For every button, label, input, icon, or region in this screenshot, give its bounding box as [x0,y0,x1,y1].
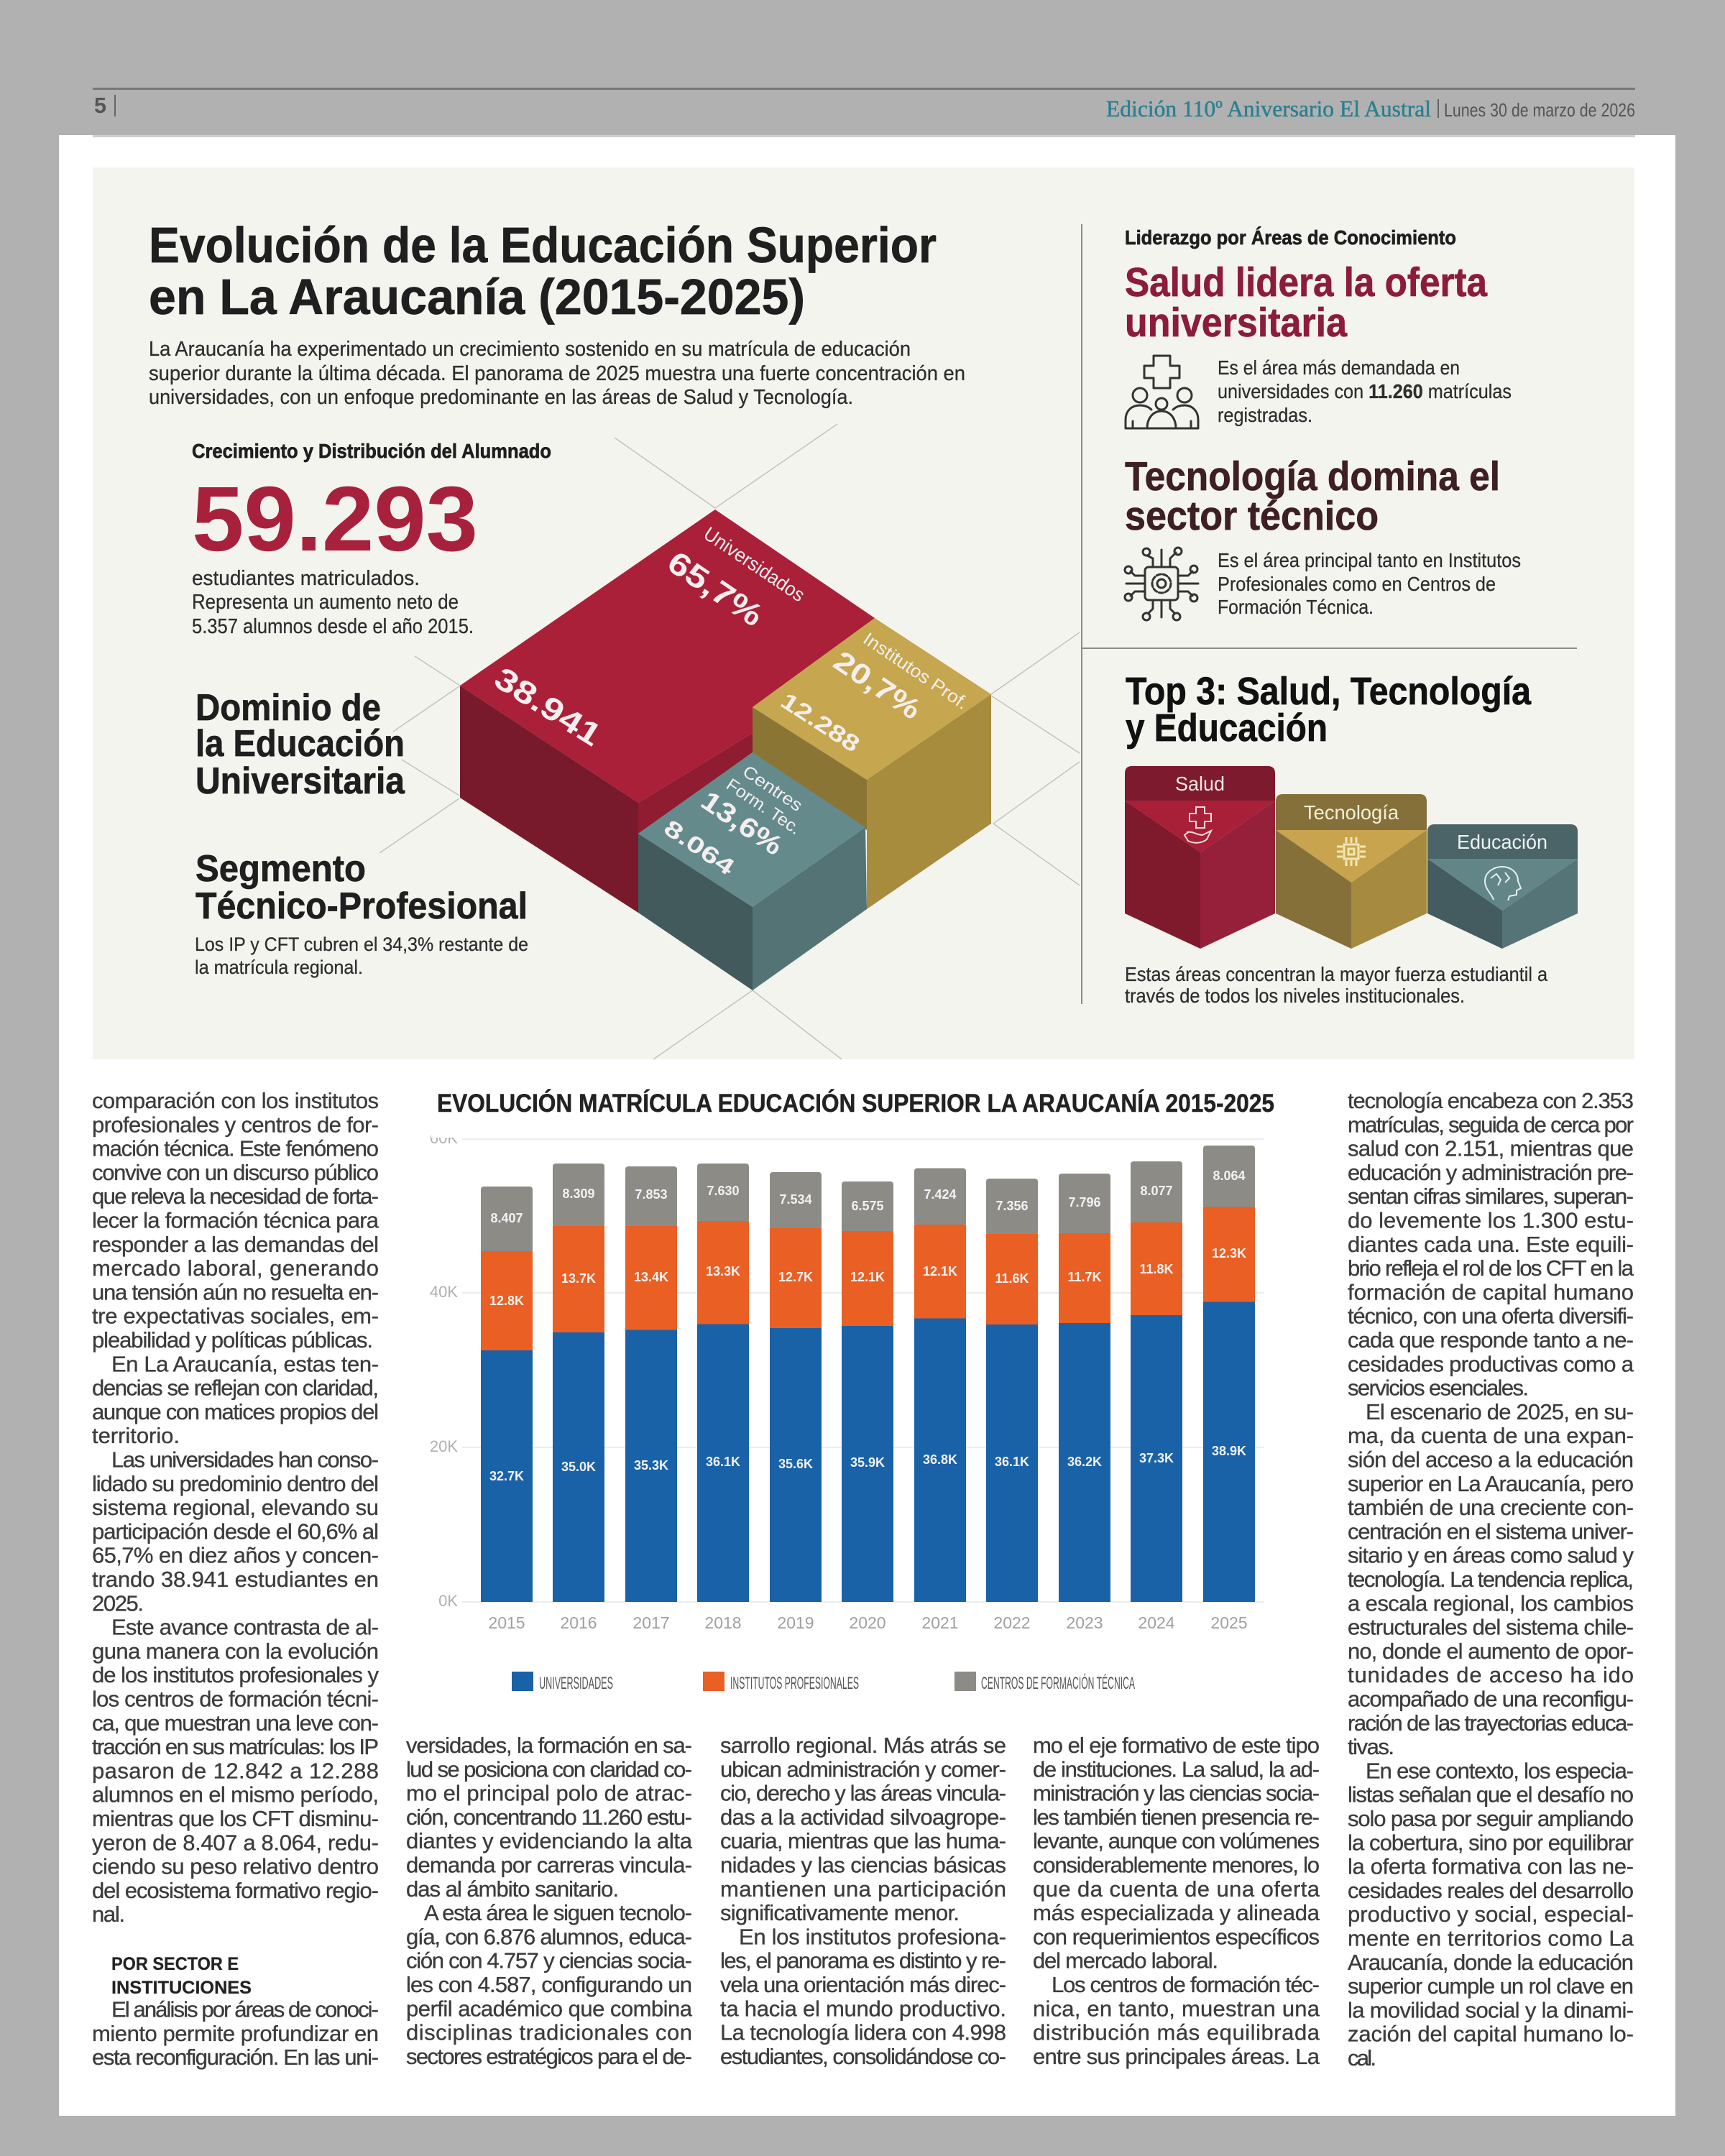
article column 3: significativamente menor. [720,1900,960,1925]
block labels: Institutos Prof. [860,629,972,714]
bar 2019: 35.6K [778,1457,813,1471]
article column 5: sitario y en áreas como salud y [1348,1543,1634,1568]
block labels: Centres [739,762,806,816]
bar 2017: 2017 [632,1613,670,1632]
article column 1: mación técnica. Este fenómeno [92,1136,379,1161]
bar 2020: 12.1K [850,1270,885,1284]
article column 5: tunidades de acceso ha ido [1348,1662,1634,1687]
article column 3: vela una orientación más direc- [720,1972,1006,1997]
bar 2018: 13.3K [706,1264,740,1279]
article column 1: Las universidades han conso- [111,1447,379,1472]
heading: top 3: y Educación [1126,706,1328,750]
article column 1: yeron de 8.407 a 8.064, redu- [92,1830,379,1855]
intro paragraph: La Araucanía ha experimentado un crecimiento sostenido en su matrícula de educación [149,338,911,361]
article column 2: lud se posiciona con claridad co- [406,1756,692,1782]
bar 2020: 2020 [849,1613,886,1632]
article column 1: 2025. [92,1590,144,1616]
article column 4: más especializada y alineada [1033,1900,1320,1925]
intro paragraph: universidades, con un enfoque predominante en las áreas de Salud y Tecnología. [149,386,853,409]
article column 1: alumnos en el mismo período, [92,1782,379,1807]
article column 5: ración de las trayectorias educa- [1348,1710,1634,1736]
bar 2015: 8.407 [490,1211,523,1225]
heading: university dominance: Universitaria [196,760,405,802]
bar 2018: 7.630 [707,1184,740,1198]
bar 2023: 11.7K [1067,1270,1102,1284]
bar 2022: 36.1K [995,1455,1029,1469]
heading: technical segment: Técnico-Profesional [196,885,528,927]
top 3 blocks [1125,766,1578,949]
article column 1: lecer la formación técnica para [92,1207,380,1233]
block: institutos [753,618,991,909]
heading: technical segment [196,848,528,927]
article column 1: pasaron de 12.842 a 12.288 [92,1758,379,1783]
article column 1: profesionales y centros de for- [92,1112,379,1137]
article column 1: lidado su predominio dentro del [92,1471,379,1496]
bar 2019: 7.534 [779,1192,812,1207]
technical segment text [195,934,528,978]
article column 2: ción, concentrando 11.260 estu- [406,1805,692,1830]
article column 1: mientras que los CFT disminu- [92,1806,379,1831]
article column 1: INSTITUCIONES [111,1978,252,1998]
article column 2: perfil académico que combina [406,1996,693,2021]
bar 2022: 7.356 [995,1199,1029,1213]
chart heading: EVOLUCIÓN MATRÍCULA EDUCACIÓN SUPERIOR LA ARAUCANÍA 2015-2025 [437,1089,1274,1118]
article column 5: no, donde el aumento de opor- [1348,1639,1634,1664]
title [149,217,937,325]
block labels: Universidados [699,522,809,606]
article column 4: entre sus principales áreas. La [1033,2044,1320,2069]
caption: top 3: través de todos los niveles institucionales. [1125,985,1465,1007]
heading: salud: Salud lidera la oferta [1125,259,1488,305]
article column 5: técnico, con una oferta diversifi- [1348,1304,1634,1329]
heading: technical segment: Segmento [196,848,366,890]
bar 2025: 38.9K [1212,1444,1246,1458]
article column 2: ción con 4.757 y ciencias socia- [406,1948,692,1973]
bar 2023: 7.796 [1068,1195,1101,1210]
article column 3: sarrollo regional. Más atrás se [720,1733,1006,1758]
bar 2018 [697,1164,749,1632]
caption: top 3: Estas áreas concentran la mayor fuerza estudiantil a [1125,963,1547,985]
article column 1: mercado laboral, generando [92,1256,379,1281]
article column 2: sectores estratégicos para el de- [406,2044,692,2069]
isometric block chart [460,510,991,990]
article column 2: diantes y evidenciando la alta [406,1828,693,1853]
article column 1: ca, que muestran una leve con- [92,1710,379,1736]
article column 5: a escala regional, los cambios [1348,1590,1634,1616]
growth description [192,567,474,638]
article column 1: comparación con los institutos [92,1088,379,1113]
article column 5: la cobertura, sino por equilibrar [1348,1830,1634,1855]
article column 5: superior cumple un rol clave en [1348,1973,1634,1999]
bar 2020: 35.9K [850,1455,885,1470]
subheading: growth: Crecimiento y Distribución del Alumnado [192,440,551,462]
article column 5: cesidades productivas como a [1348,1351,1634,1376]
article column 1: ciendo su peso relativo dentro [92,1854,379,1879]
bar 2019: 2019 [777,1613,814,1632]
article column 5: mente en territorios como La [1348,1926,1634,1950]
article column 1: participación desde el 60,6% al [92,1519,379,1544]
article column 5: cal. [1348,2045,1376,2070]
title: Evolución de la Educación Superior [149,217,937,273]
article column 5: tecnología. La tendencia replica, [1348,1567,1634,1592]
bar 2023: 36.2K [1067,1455,1102,1469]
article column 5: estructurales del sistema chile- [1348,1615,1634,1640]
article column 1: responder a las demandas del [92,1232,379,1257]
article column 5: servicios esenciales. [1348,1376,1529,1401]
article column 5: superior en La Araucanía, pero [1348,1471,1634,1496]
article column 4 [1033,1733,1320,2069]
article column 5: formación de capital humano [1348,1279,1634,1304]
growth description: estudiantes matriculados. [192,567,420,590]
block labels: 8.064 [659,814,740,880]
heading: top 3 [1126,670,1532,750]
block labels [488,522,972,880]
article column 1: del ecosistema formativo regio- [92,1878,379,1903]
block: salud [1125,766,1275,949]
text: salud: Es el área más demandada en [1218,356,1460,379]
bar 2016: 2016 [560,1613,597,1632]
chart legend: CENTROS DE FORMACIÓN TÉCNICA [981,1674,1135,1693]
heading: tecnologia [1125,453,1500,539]
y axis and grid: 60K [430,1129,458,1147]
block: educacion: Educación [1457,831,1547,853]
article column 5: brio refleja el rol de los CFT en la [1348,1256,1634,1281]
article column 1: de los institutos profesionales y [92,1662,380,1687]
heading: tecnologia: Tecnología domina el [1125,453,1500,499]
bar 2023: 2023 [1066,1613,1103,1632]
growth description: Representa un aumento neto de [192,591,459,614]
article column 5: sión del acceso a la educación [1348,1447,1634,1472]
bar 2015: 12.8K [489,1294,524,1308]
article column 4: ministración y las ciencias socia- [1033,1781,1320,1806]
subheading: leadership: Liderazgo por Áreas de Conocimiento [1125,226,1456,249]
text: salud: registradas. [1218,404,1312,426]
bar 2024 [1131,1161,1182,1632]
article column 1: Este avance contrasta de al- [111,1615,379,1640]
text: tecnologia [1218,549,1521,618]
article column 1: nal. [92,1902,125,1927]
article column 1: tracción en sus matrículas: los IP [92,1734,379,1759]
bar 2017: 13.4K [634,1270,668,1284]
block: educacion [1427,824,1578,949]
article column 2: versidades, la formación en sa- [406,1733,692,1758]
article column 5: do levemente los 1.300 estu- [1348,1207,1634,1233]
article column 5: ma, da cuenta de una expan- [1348,1423,1634,1448]
y axis and grid: 20K [430,1437,458,1455]
heading: salud [1125,259,1488,346]
bar 2016: 13.7K [561,1271,596,1286]
article column 3 [720,1733,1006,2069]
article column 4: de instituciones. La salud, la ad- [1033,1756,1320,1782]
text: tecnologia: Formación Técnica. [1218,596,1374,618]
y axis and grid: 40K [430,1283,458,1301]
article column 5: listas señalan que el desafío no [1348,1782,1634,1807]
article column 1: aunque con matices propios del [92,1399,379,1424]
block: tecnologia: Tecnología [1304,801,1399,824]
article column 4: con requerimientos específicos [1033,1924,1320,1949]
panel: infographic [93,167,1634,1059]
article column 1: que releva la necesidad de forta- [92,1184,379,1209]
article column 4: que da cuenta de una oferta [1033,1876,1320,1902]
icon: chip with gear [1125,548,1198,620]
heading: university dominance: Dominio de [196,687,381,729]
article column 5: centración en el sistema univer- [1348,1519,1634,1544]
right column rules [1081,224,1577,1004]
article column 3: les, el panorama es distinto y re- [720,1948,1006,1973]
article column 4: considerablemente menores, lo [1033,1853,1320,1877]
article column 2: mo el principal polo de atrac- [406,1781,692,1806]
bar 2016 [553,1164,604,1632]
article column 3: En los institutos profesiona- [739,1924,1006,1949]
article column 3: nidades y las ciencias básicas [720,1853,1006,1877]
article column 1: tre expectativas sociales, em- [92,1304,379,1329]
bar 2024: 2024 [1138,1613,1175,1632]
article column 2: disciplinas tradicionales con [406,2020,692,2045]
article column 3: das a la actividad silvoagrope- [720,1805,1006,1830]
bar 2021: 12.1K [923,1264,957,1279]
article column 1: sistema regional, elevando su [92,1495,379,1520]
article column 1: territorio. [92,1423,180,1448]
article column 1: pleabilidad y políticas públicas. [92,1327,373,1353]
caption: top 3 [1125,963,1547,1007]
bar 2015: 32.7K [489,1469,524,1483]
article column 1: los centros de formación técni- [92,1686,379,1712]
article column 4: del mercado laboral. [1033,1948,1218,1973]
article column 3: mantienen una participación [720,1876,1006,1902]
article column 1: trando 38.941 estudiantes en [92,1567,379,1592]
article column 1 [92,1088,380,2070]
newspaper header: Lunes 30 de marzo de 2026 [1444,99,1635,121]
technical segment text: Los IP y CFT cubren el 34,3% restante de [195,934,528,955]
article column 5: la movilidad social y la dinami- [1348,1997,1634,2022]
bar 2019: 12.7K [778,1270,813,1284]
bar 2020 [842,1181,893,1632]
article column 5: cesidades reales del desarrollo [1348,1878,1634,1903]
article column 5: también de una creciente con- [1348,1495,1634,1520]
block labels: 38.941 [488,660,607,753]
article column 5: productivo y social, especial- [1348,1902,1634,1927]
article column 2: demanda por carreras vincula- [406,1853,692,1877]
bar 2018: 2018 [704,1613,742,1632]
bar 2024: 11.8K [1139,1262,1174,1276]
bar 2017 [625,1166,677,1632]
article column 4: Los centros de formación téc- [1052,1972,1320,1997]
article column 5: En ese contexto, los especia- [1366,1758,1634,1783]
bar 2018: 36.1K [706,1455,740,1469]
article column 5: cada que responde tanto a ne- [1348,1327,1634,1353]
article column 5: acompañado de una reconfigu- [1348,1686,1634,1712]
article column 1: POR SECTOR E [111,1954,239,1974]
bar 2025: 2025 [1210,1613,1248,1632]
bar 2021 [914,1169,966,1632]
heading: salud: universitaria [1125,300,1348,346]
article column 4: les también tienen presencia re- [1033,1805,1320,1830]
heading: top 3: Top 3: Salud, Tecnología [1126,670,1532,713]
bar 2025: 12.3K [1212,1246,1246,1261]
bar 2025: 8.064 [1213,1169,1246,1183]
intro paragraph: superior durante la última década. El panorama de 2025 muestra una fuerte concentración en [149,362,965,385]
bar 2017: 35.3K [634,1458,668,1473]
bar 2024: 37.3K [1139,1451,1174,1465]
article column 1: guna manera con la evolución [92,1639,379,1664]
block labels: 12.288 [776,688,865,757]
article column 5: la oferta formativa con las ne- [1348,1854,1634,1879]
block: salud: Salud [1175,773,1225,795]
article column 3: estudiantes, consolidándose co- [720,2044,1006,2069]
article column 4: nica, en tanto, muestran una [1033,1996,1320,2021]
article column 5: sentan cifras similares, superan- [1348,1184,1634,1209]
article column 4: distribución más equilibrada [1033,2020,1320,2045]
article column 1: esta reconfiguración. En las uni- [92,2045,379,2070]
article column 2 [406,1733,693,2069]
heading: tecnologia: sector técnico [1125,493,1379,539]
chart legend: UNIVERSIDADES [539,1674,613,1693]
article column 5: zación del capital humano lo- [1348,2022,1634,2047]
chart legend [512,1672,1135,1693]
article column 1: El análisis por áreas de conoci- [111,1996,379,2022]
text: salud: universidades con 11.260 matrículas [1218,380,1512,402]
heading: university dominance [196,687,405,802]
article column 3: cuaria, mientras que las huma- [720,1828,1006,1853]
bar 2015 [481,1187,533,1632]
article column 3: ubican administración y comer- [720,1756,1006,1782]
bar 2024: 8.077 [1140,1184,1173,1198]
article column 2: das al ámbito sanitario. [406,1876,619,1902]
bar 2021: 7.424 [924,1187,957,1202]
text: tecnologia: Es el área principal tanto en Institutos [1218,549,1521,571]
article column 1: 65,7% en diez años y concen- [92,1543,379,1568]
decorative guide lines [380,424,1080,1059]
stacked bar chart [430,1125,1264,1693]
bar 2019 [770,1172,822,1632]
article column 4: mo el eje formativo de este tipo [1033,1733,1320,1758]
block labels: Form. Tec. [722,775,804,839]
bar 2022 [986,1179,1038,1632]
technical segment text: la matrícula regional. [195,957,363,978]
bar 2016: 8.309 [562,1187,595,1201]
article column 5: diantes cada una. Este equili- [1348,1232,1634,1257]
icon: health and people [1126,356,1198,428]
bar 2025 [1203,1146,1255,1632]
bar 2022: 11.6K [995,1271,1029,1286]
article column 1: miento permite profundizar en [92,2021,379,2046]
article column 1: dencias se reflejan con claridad, [92,1376,379,1401]
heading: university dominance: la Educación [196,723,405,765]
block labels: 20,7% [828,645,926,726]
article column 5: tivas. [1348,1734,1394,1759]
article column 3: ta hacia el mundo productivo. [720,1996,1006,2021]
article column 3: La tecnología lidera con 4.998 [720,2020,1006,2045]
bar 2016: 35.0K [561,1460,596,1474]
bar 2015: 2015 [488,1613,525,1632]
article column 5 [1348,1088,1634,2070]
bar 2021: 36.8K [923,1452,957,1467]
article column 5: salud con 2.151, mientras que [1348,1136,1634,1161]
bar 2017: 7.853 [635,1187,668,1202]
article column 5: tecnología encabeza con 2.353 [1348,1088,1634,1113]
article column 4: levante, aunque con volúmenes [1033,1828,1320,1853]
growth description: 5.357 alumnos desde el año 2015. [192,615,474,638]
bar 2023 [1059,1174,1110,1632]
block labels: 13,6% [695,786,788,862]
y axis and grid [430,1125,1264,1610]
text: salud [1218,356,1512,426]
block: universidades [460,510,875,913]
y axis and grid: 0K [438,1592,458,1610]
article column 1: convive con un discurso público [92,1160,379,1185]
bar 2021: 2021 [921,1613,959,1632]
block: centros [638,752,867,990]
title: en La Araucanía (2015-2025) [149,269,805,325]
newspaper header: Edición 110º Aniversario El Austral [1106,96,1431,121]
article column 2: gía, con 6.876 alumnos, educa- [406,1924,692,1949]
article column 5: Araucanía, donde la educación [1348,1950,1634,1975]
intro paragraph [149,338,965,409]
bar 2022: 2022 [993,1613,1031,1632]
article column 3: cio, derecho y las áreas vincula- [720,1781,1006,1806]
article column 5: educación y administración pre- [1348,1160,1634,1185]
article column 5: solo pasa por seguir ampliando [1348,1806,1634,1831]
newspaper header: 5 [94,93,106,118]
text: tecnologia: Profesionales como en Centros de [1218,573,1496,595]
newspaper header [93,88,1635,121]
big number: 59.293 [192,468,478,571]
bar 2020: 6.575 [851,1199,884,1213]
block labels: 65,7% [661,545,770,634]
block: tecnologia [1276,794,1427,949]
article column 2: les con 4.587, configurando un [406,1972,692,1997]
article column 1: En La Araucanía, estas ten- [111,1351,379,1376]
article column 2: A esta área le siguen tecnolo- [424,1900,692,1925]
article column 1: una tensión aún no resuelta en- [92,1279,379,1304]
article column 5: El escenario de 2025, en su- [1366,1399,1634,1424]
article column 5: matrículas, seguida de cerca por [1348,1112,1634,1137]
chart legend: INSTITUTOS PROFESIONALES [730,1674,859,1693]
